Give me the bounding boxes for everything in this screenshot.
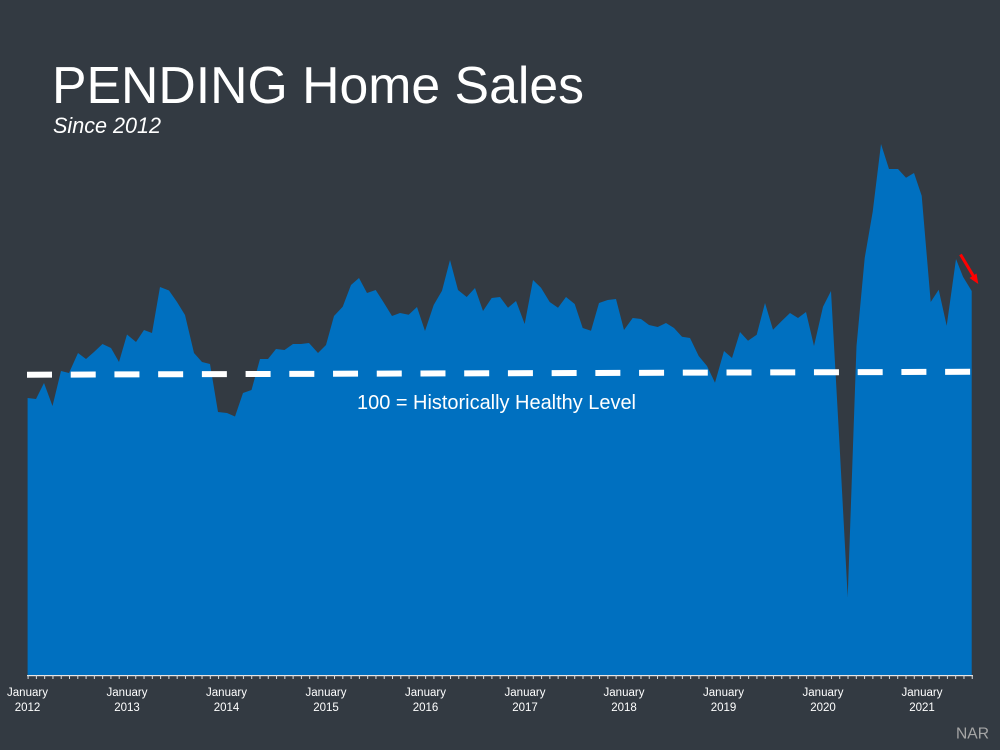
source credit: NAR: [956, 726, 989, 742]
x-axis labels: 2016: [413, 702, 438, 714]
x-axis labels: 2017: [512, 702, 538, 714]
x-axis labels: January: [206, 687, 247, 699]
x-axis labels: January: [405, 687, 446, 699]
axis line with monthly ticks: [27, 675, 973, 679]
x-axis labels: 2020: [810, 702, 836, 714]
x-axis labels: January: [604, 687, 645, 699]
x-axis labels: January: [7, 687, 48, 699]
x-axis labels: January: [505, 687, 546, 699]
x-axis labels: 2013: [114, 702, 140, 714]
x-axis labels: January: [107, 687, 148, 699]
x-axis labels: 2019: [711, 702, 736, 714]
title: PENDING Home Sales: [52, 57, 584, 115]
x-axis labels: 2018: [611, 702, 637, 714]
x-axis labels: January: [703, 687, 744, 699]
x-axis labels: January: [803, 687, 844, 699]
dashed reference line at 100: [27, 372, 971, 375]
red arrow: recent decline: [960, 254, 978, 284]
x-axis labels: January: [306, 687, 347, 699]
x-axis labels: January: [902, 687, 943, 699]
subtitle: Since 2012: [53, 113, 161, 138]
x-axis labels: [7, 687, 943, 714]
reference line label: 100 = Historically Healthy Level: [357, 392, 636, 414]
x-axis labels: 2021: [909, 702, 935, 714]
x-axis labels: 2015: [313, 702, 339, 714]
area chart: pending home sales: [28, 144, 972, 675]
x-axis labels: 2014: [214, 702, 240, 714]
x-axis labels: 2012: [15, 702, 40, 714]
